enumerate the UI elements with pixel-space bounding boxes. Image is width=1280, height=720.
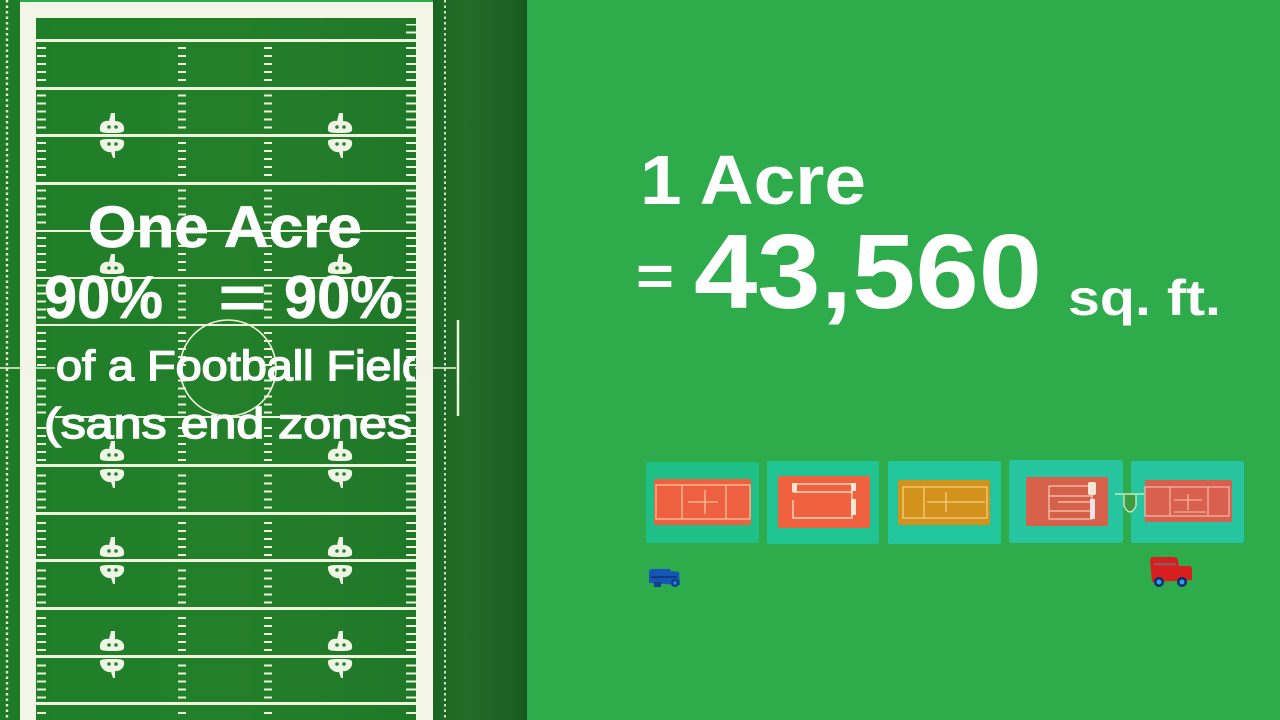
center circle [180,320,276,416]
text: equals sign: = [636,244,674,307]
panel: field tile 5 [1131,461,1244,543]
panel: field tile 3 [888,461,1001,544]
field turf [36,18,416,720]
panel: football field [0,0,527,720]
icon: goal post [1115,494,1144,512]
text: 90% = 90%: 90% [284,264,403,331]
text: sq. ft.: sq. ft. [1068,270,1221,326]
icon: red truck [1150,557,1192,587]
midfield marks [0,320,458,416]
yard ticks [37,24,416,720]
left sideline strip [0,0,20,720]
panel: field tile 2 [767,461,879,544]
text: sans end zones: (sans end zones [44,400,412,448]
text: 90% = 90%: 90% [44,264,163,331]
text: 90% = 90%: = [218,264,267,331]
yard lines [36,39,416,705]
heading: 1 Acre: 1 Acre [640,141,866,219]
panel: field tile 4 [1009,460,1123,543]
right sideline strip [433,0,527,720]
panel: field tile 1 [646,462,759,543]
field border [20,2,433,720]
yard numbers [100,113,352,678]
icon: blue truck [649,569,680,587]
heading: One Acre: One Acre [88,195,362,260]
text: of a Football Field: of a Football Field [56,342,428,389]
text: 90% = 90% [44,264,403,331]
big number: 43,560: 43,560 [694,213,1042,331]
